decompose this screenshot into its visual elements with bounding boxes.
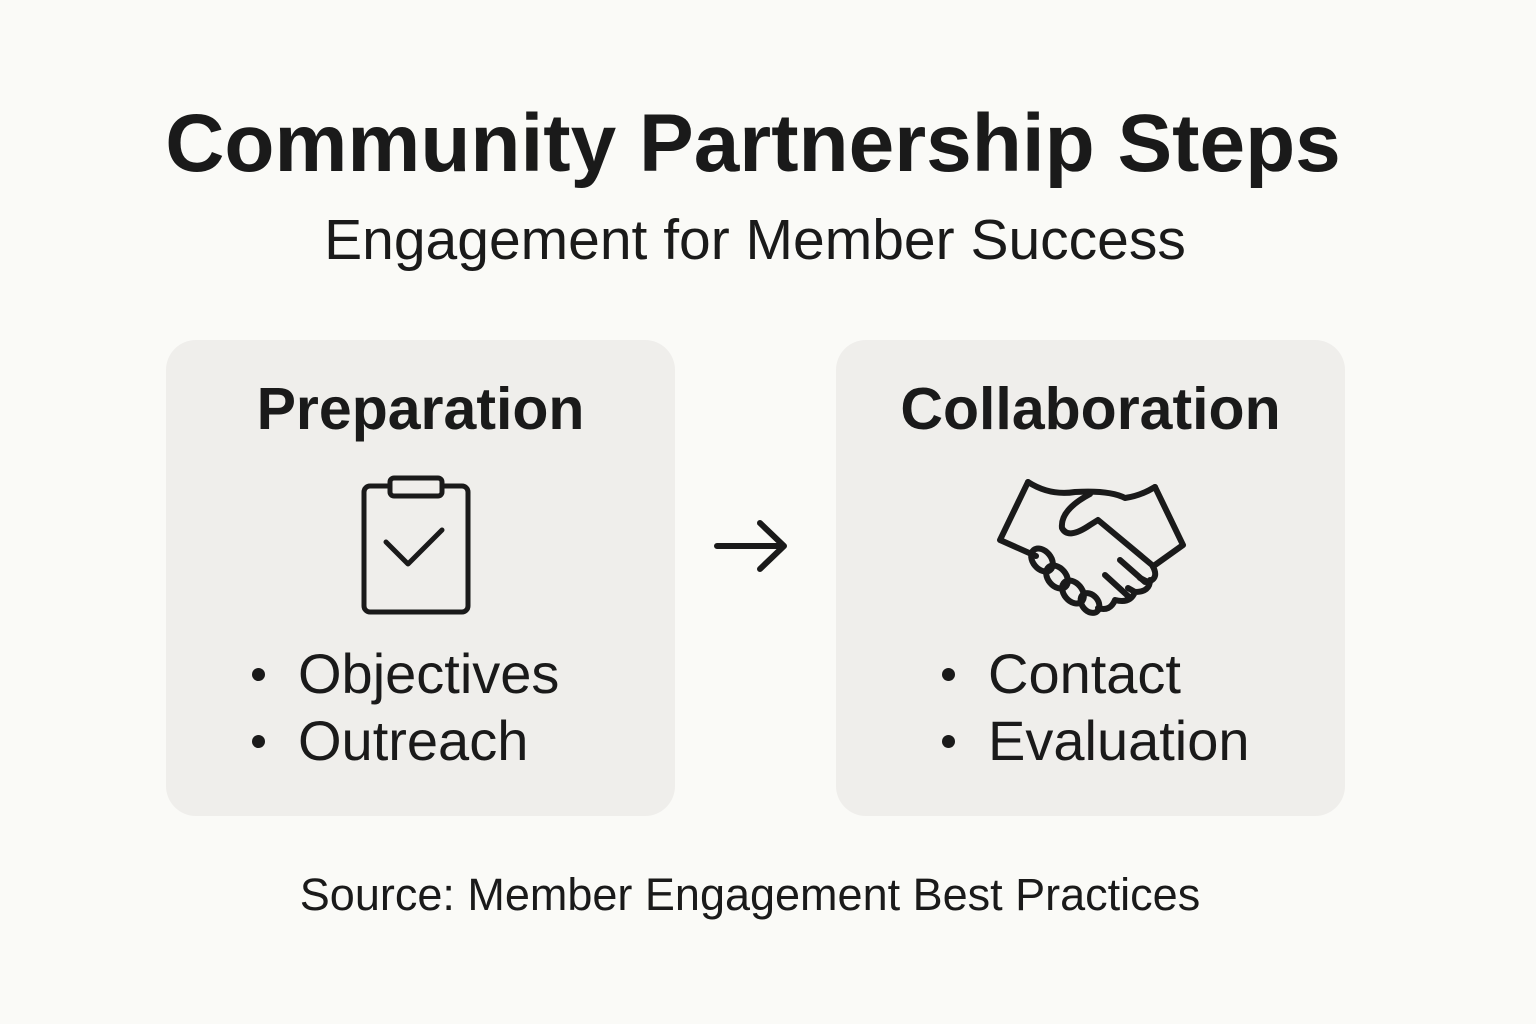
bullets: Outreach <box>298 709 528 772</box>
bullets: Contact <box>988 642 1181 705</box>
subtitle: Engagement for Member Success <box>324 208 1186 272</box>
bullets: Objectives <box>298 642 559 705</box>
heading: Collaboration: Collaboration <box>900 376 1281 442</box>
bullets: Evaluation <box>988 709 1250 772</box>
icon: clipboard <box>362 476 470 614</box>
source: Source: Member Engagement Best Practices <box>300 869 1200 920</box>
icon: handshake <box>997 479 1186 616</box>
title: Community Partnership Steps <box>165 98 1341 189</box>
arrow <box>714 520 787 572</box>
panel: collaboration <box>836 340 1345 816</box>
bullets <box>252 642 559 772</box>
heading: Preparation: Preparation <box>257 376 584 442</box>
panel: preparation <box>166 340 675 816</box>
bullets <box>942 642 1250 772</box>
